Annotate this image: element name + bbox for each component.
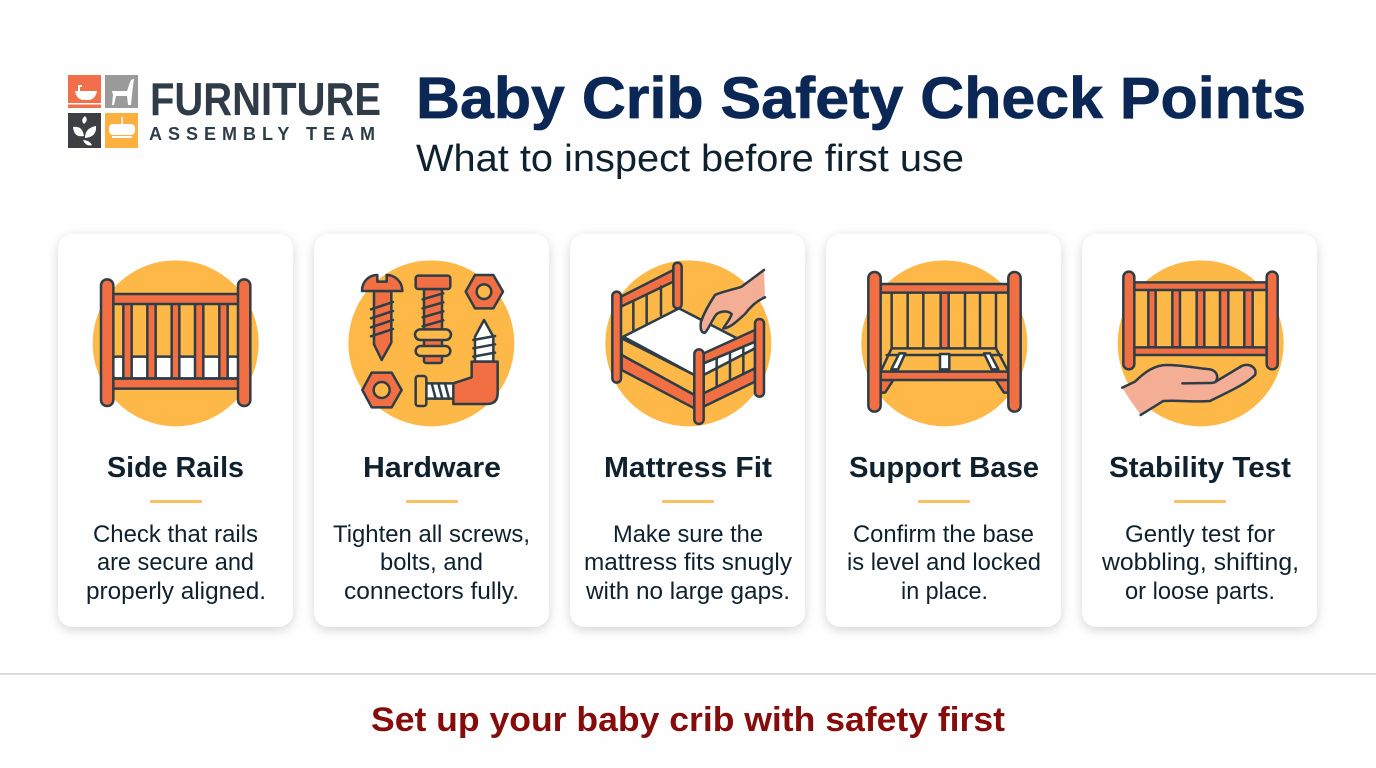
title: Baby Crib Safety Check Points xyxy=(416,66,1306,131)
divider xyxy=(1174,500,1226,503)
panel: mattress fit xyxy=(570,234,805,627)
description: support base: in place. xyxy=(901,578,988,605)
description: stability test: or loose parts. xyxy=(1125,578,1275,605)
icon: screws, bolts and nuts xyxy=(348,260,514,426)
description: side rails: Check that rails xyxy=(93,521,258,548)
description: stability test: Gently test for xyxy=(1125,521,1275,548)
logo tagline: ASSEMBLY TEAM xyxy=(149,124,375,144)
description: support base: Confirm the base xyxy=(853,521,1034,548)
description: stability test: wobbling, shifting, xyxy=(1101,549,1299,576)
description: support base: is level and locked xyxy=(847,549,1041,576)
logo wordmark: FURNITURE xyxy=(150,73,381,125)
logo: Furniture Assembly Team xyxy=(68,73,381,148)
icon: crib support base xyxy=(861,260,1027,426)
icon: hand testing crib stability xyxy=(1118,260,1284,426)
divider xyxy=(662,500,714,503)
logo tile: chair xyxy=(105,75,138,108)
footer tagline: Set up your baby crib with safety first xyxy=(371,701,1005,739)
panel: stability test xyxy=(1082,234,1317,627)
divider xyxy=(406,500,458,503)
panel: hardware xyxy=(314,234,549,627)
logo tile: lamp xyxy=(105,113,138,148)
description: support base xyxy=(847,521,1041,605)
heading: support base: Support Base xyxy=(849,452,1039,484)
description: hardware: bolts, and xyxy=(380,549,483,576)
heading: stability test: Stability Test xyxy=(1109,452,1291,484)
description: hardware: Tighten all screws, xyxy=(333,521,530,548)
description: hardware: connectors fully. xyxy=(344,578,519,605)
description: side rails: are secure and xyxy=(97,549,254,576)
heading: hardware: Hardware xyxy=(363,452,501,484)
description: stability test xyxy=(1101,521,1299,605)
description: mattress fit: Make sure the xyxy=(613,521,763,548)
logo tile: sink xyxy=(68,75,101,108)
heading: mattress fit: Mattress Fit xyxy=(604,452,772,484)
divider xyxy=(918,500,970,503)
divider xyxy=(150,500,202,503)
icon: hand pressing on crib mattress xyxy=(605,260,771,426)
description: mattress fit: mattress fits snugly xyxy=(584,549,792,576)
logo tile: leaves xyxy=(68,113,101,148)
icon: crib side rails xyxy=(93,260,259,426)
panel: support base xyxy=(826,234,1061,627)
description: side rails xyxy=(86,521,266,605)
description: hardware xyxy=(333,521,530,605)
panel: side rails xyxy=(58,234,293,627)
description: mattress fit xyxy=(584,521,792,605)
description: mattress fit: with no large gaps. xyxy=(585,578,790,605)
subtitle: What to inspect before first use xyxy=(416,138,964,180)
heading: side rails: Side Rails xyxy=(107,452,244,484)
description: side rails: properly aligned. xyxy=(86,578,266,605)
